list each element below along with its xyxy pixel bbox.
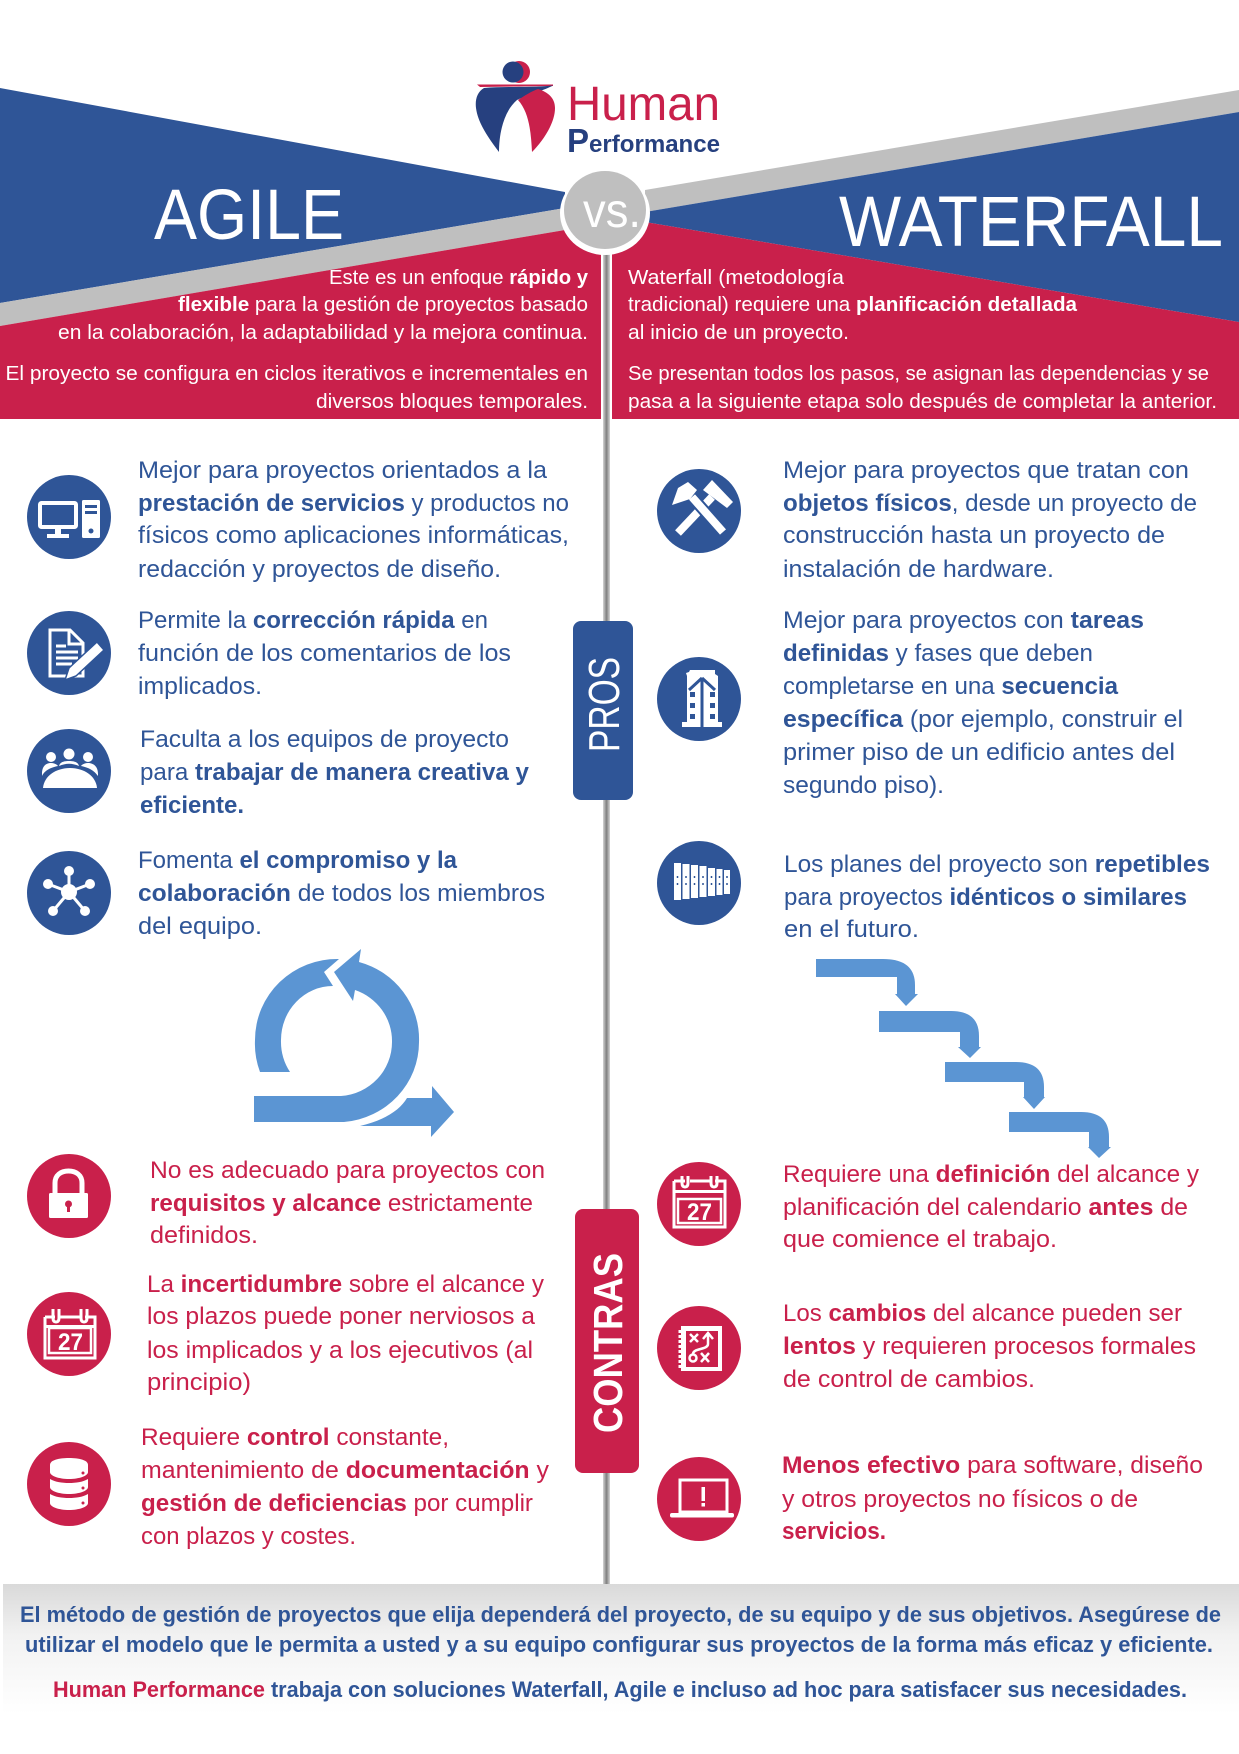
agile pro 2 <box>27 607 511 700</box>
agile con 2: principio) <box>147 1369 251 1396</box>
agile con 3: Requiere control constante, <box>141 1424 449 1451</box>
agile pro 1 <box>27 457 569 583</box>
icon: computer <box>27 475 111 559</box>
waterfall con 1: que comience el trabajo. <box>783 1226 1057 1253</box>
agile pro 1: redacción y proyectos de diseño. <box>138 556 501 583</box>
agile pro 1: Mejor para proyectos orientados a la <box>138 457 547 484</box>
agile pro 1: prestación de servicios y productos no <box>138 490 569 517</box>
waterfall con 1 <box>657 1161 1200 1253</box>
waterfall intro text: Se presentan todos los pasos, se asignan las dependencias y se <box>628 362 1209 385</box>
waterfall con 3: y otros proyectos no físicos o de <box>782 1486 1138 1513</box>
agile pro 2: implicados. <box>138 673 262 700</box>
agile con 1: No es adecuado para proyectos con <box>150 1157 545 1184</box>
waterfall pro 2: completarse en una secuencia <box>783 673 1118 700</box>
agile con 1: definidos. <box>150 1222 258 1249</box>
tab: CONTRAS: CONTRAS <box>585 1253 631 1433</box>
logo: Human Performance: Human <box>567 78 720 131</box>
agile con 1: requisitos y alcance estrictamente <box>150 1190 533 1217</box>
logo: Human Performance: Performance <box>567 122 720 159</box>
agile pro 4: del equipo. <box>138 913 262 940</box>
icon: calendar 27 <box>657 1162 741 1246</box>
waterfall intro text: Waterfall (metodología <box>628 266 845 289</box>
agile con 2 <box>27 1271 545 1396</box>
agile pro 3: para trabajar de manera creativa y <box>140 759 529 786</box>
icon: calendar 27: 27 <box>687 1199 712 1226</box>
agile pro 2: función de los comentarios de los <box>138 640 511 667</box>
waterfall pro 2: segundo piso). <box>783 772 944 799</box>
waterfall pro 1: Mejor para proyectos que tratan con <box>783 457 1189 484</box>
logo: Human Performance <box>476 61 720 159</box>
agile con 3 <box>27 1424 550 1550</box>
vs badge <box>560 171 650 255</box>
icon: building with arrow <box>657 657 741 741</box>
waterfall pro 1: instalación de hardware. <box>783 556 1054 583</box>
agile con 3: mantenimiento de documentación y <box>141 1457 550 1484</box>
waterfall con 2: lentos y requieren procesos formales <box>783 1333 1196 1360</box>
agile intro text <box>6 266 589 413</box>
agile pro 3: eficiente. <box>140 792 244 819</box>
waterfall con 1: planificación del calendario antes de <box>783 1194 1188 1221</box>
waterfall pro 1: construcción hasta un proyecto de <box>783 522 1165 549</box>
waterfall pro 2: definidas y fases que deben <box>783 640 1093 667</box>
waterfall pro 2: Mejor para proyectos con tareas <box>783 607 1144 634</box>
waterfall intro text: pasa a la siguiente etapa solo después de completar la anterior. <box>628 390 1217 413</box>
agile con 2: La incertidumbre sobre el alcance y <box>147 1271 545 1298</box>
agile pro 2: Permite la corrección rápida en <box>138 607 488 634</box>
waterfall con 3: Menos efectivo para software, diseño <box>782 1452 1203 1479</box>
icon: waterfall stepped arrows <box>816 959 1111 1158</box>
waterfall pro 1: objetos físicos, desde un proyecto de <box>783 490 1197 517</box>
icon: strategy notebook <box>657 1306 741 1390</box>
vs badge: vs. <box>583 185 641 238</box>
icon: network nodes <box>27 851 111 935</box>
footer panel <box>3 1584 1239 1714</box>
waterfall con 1: Requiere una definición del alcance y <box>783 1161 1200 1188</box>
waterfall intro text: tradicional) requiere una planificación detallada <box>628 293 1078 316</box>
header banner <box>0 88 1239 419</box>
footer conclusion text: El método de gestión de proyectos que elija dependerá del proyecto, de su equipo y de sus objetivos. Asegúrese de <box>20 1602 1221 1627</box>
tab: CONTRAS <box>575 1209 639 1473</box>
agile con 2: los plazos puede poner nerviosos a <box>147 1303 535 1330</box>
agile pro 3: Faculta a los equipos de proyecto <box>140 726 509 753</box>
icon: crossed hammers <box>657 469 741 553</box>
agile con 1 <box>27 1154 545 1249</box>
waterfall pro 2: específica (por ejemplo, construir el <box>783 706 1183 733</box>
agile pro 1: físicos como aplicaciones informáticas, <box>138 522 569 549</box>
waterfall pro 3: Los planes del proyecto son repetibles <box>784 851 1210 878</box>
agile intro text: en la colaboración, la adaptabilidad y la mejora continua. <box>58 321 588 344</box>
icon: calendar 27 <box>27 1292 111 1376</box>
waterfall pro 3: para proyectos idénticos o similares <box>784 884 1187 911</box>
footer conclusion text: utilizar el modelo que le permita a usted y a su equipo configurar sus proyectos de la forma más eficaz y eficiente. <box>25 1632 1213 1657</box>
agile con 2: los implicados y a los ejecutivos (al <box>147 1337 533 1364</box>
footer conclusion text: Human Performance trabaja con soluciones Waterfall, Agile e incluso ad hoc para satisfacer sus necesidades. <box>53 1677 1187 1702</box>
tab: PROS: PROS <box>580 657 629 752</box>
waterfall con 3 <box>657 1452 1203 1545</box>
agile pro 4: colaboración de todos los miembros <box>138 880 545 907</box>
icon: team around table <box>27 729 111 813</box>
waterfall pro 2: primer piso de un edificio antes del <box>783 739 1175 766</box>
waterfall pro 3: en el futuro. <box>784 916 919 943</box>
icon: repeated columns <box>657 841 741 925</box>
waterfall con 3: servicios. <box>782 1518 886 1545</box>
title: AGILE: AGILE <box>154 176 344 255</box>
central divider line <box>603 250 610 1584</box>
waterfall con 2: Los cambios del alcance pueden ser <box>783 1300 1182 1327</box>
waterfall intro text <box>628 266 1217 413</box>
waterfall pro 2 <box>657 607 1183 799</box>
agile intro text: El proyecto se configura en ciclos iterativos e incrementales en <box>6 362 588 385</box>
icon: laptop alert <box>657 1457 741 1541</box>
icon: database <box>27 1442 111 1526</box>
tab: PROS <box>573 621 633 800</box>
agile intro text: flexible para la gestión de proyectos basado <box>178 293 588 316</box>
agile pro 3 <box>27 726 529 819</box>
agile con 3: con plazos y costes. <box>141 1523 356 1550</box>
waterfall con 2 <box>657 1300 1196 1393</box>
agile intro text: diversos bloques temporales. <box>316 390 588 413</box>
agile pro 4: Fomenta el compromiso y la <box>138 847 457 874</box>
icon: padlock <box>27 1154 111 1238</box>
waterfall con 2: de control de cambios. <box>783 1366 1035 1393</box>
agile intro text: Este es un enfoque rápido y <box>329 266 589 289</box>
waterfall pro 1 <box>657 457 1197 583</box>
waterfall pro 3 <box>657 841 1210 943</box>
icon: agile loop arrow <box>254 949 454 1137</box>
icon: document and pencil <box>27 611 111 695</box>
icon: calendar 27: 27 <box>58 1329 83 1356</box>
agile con 3: gestión de deficiencias por cumplir <box>141 1490 533 1517</box>
waterfall intro text: al inicio de un proyecto. <box>628 321 849 344</box>
footer conclusion text <box>20 1602 1221 1702</box>
agile pro 4 <box>27 847 545 940</box>
